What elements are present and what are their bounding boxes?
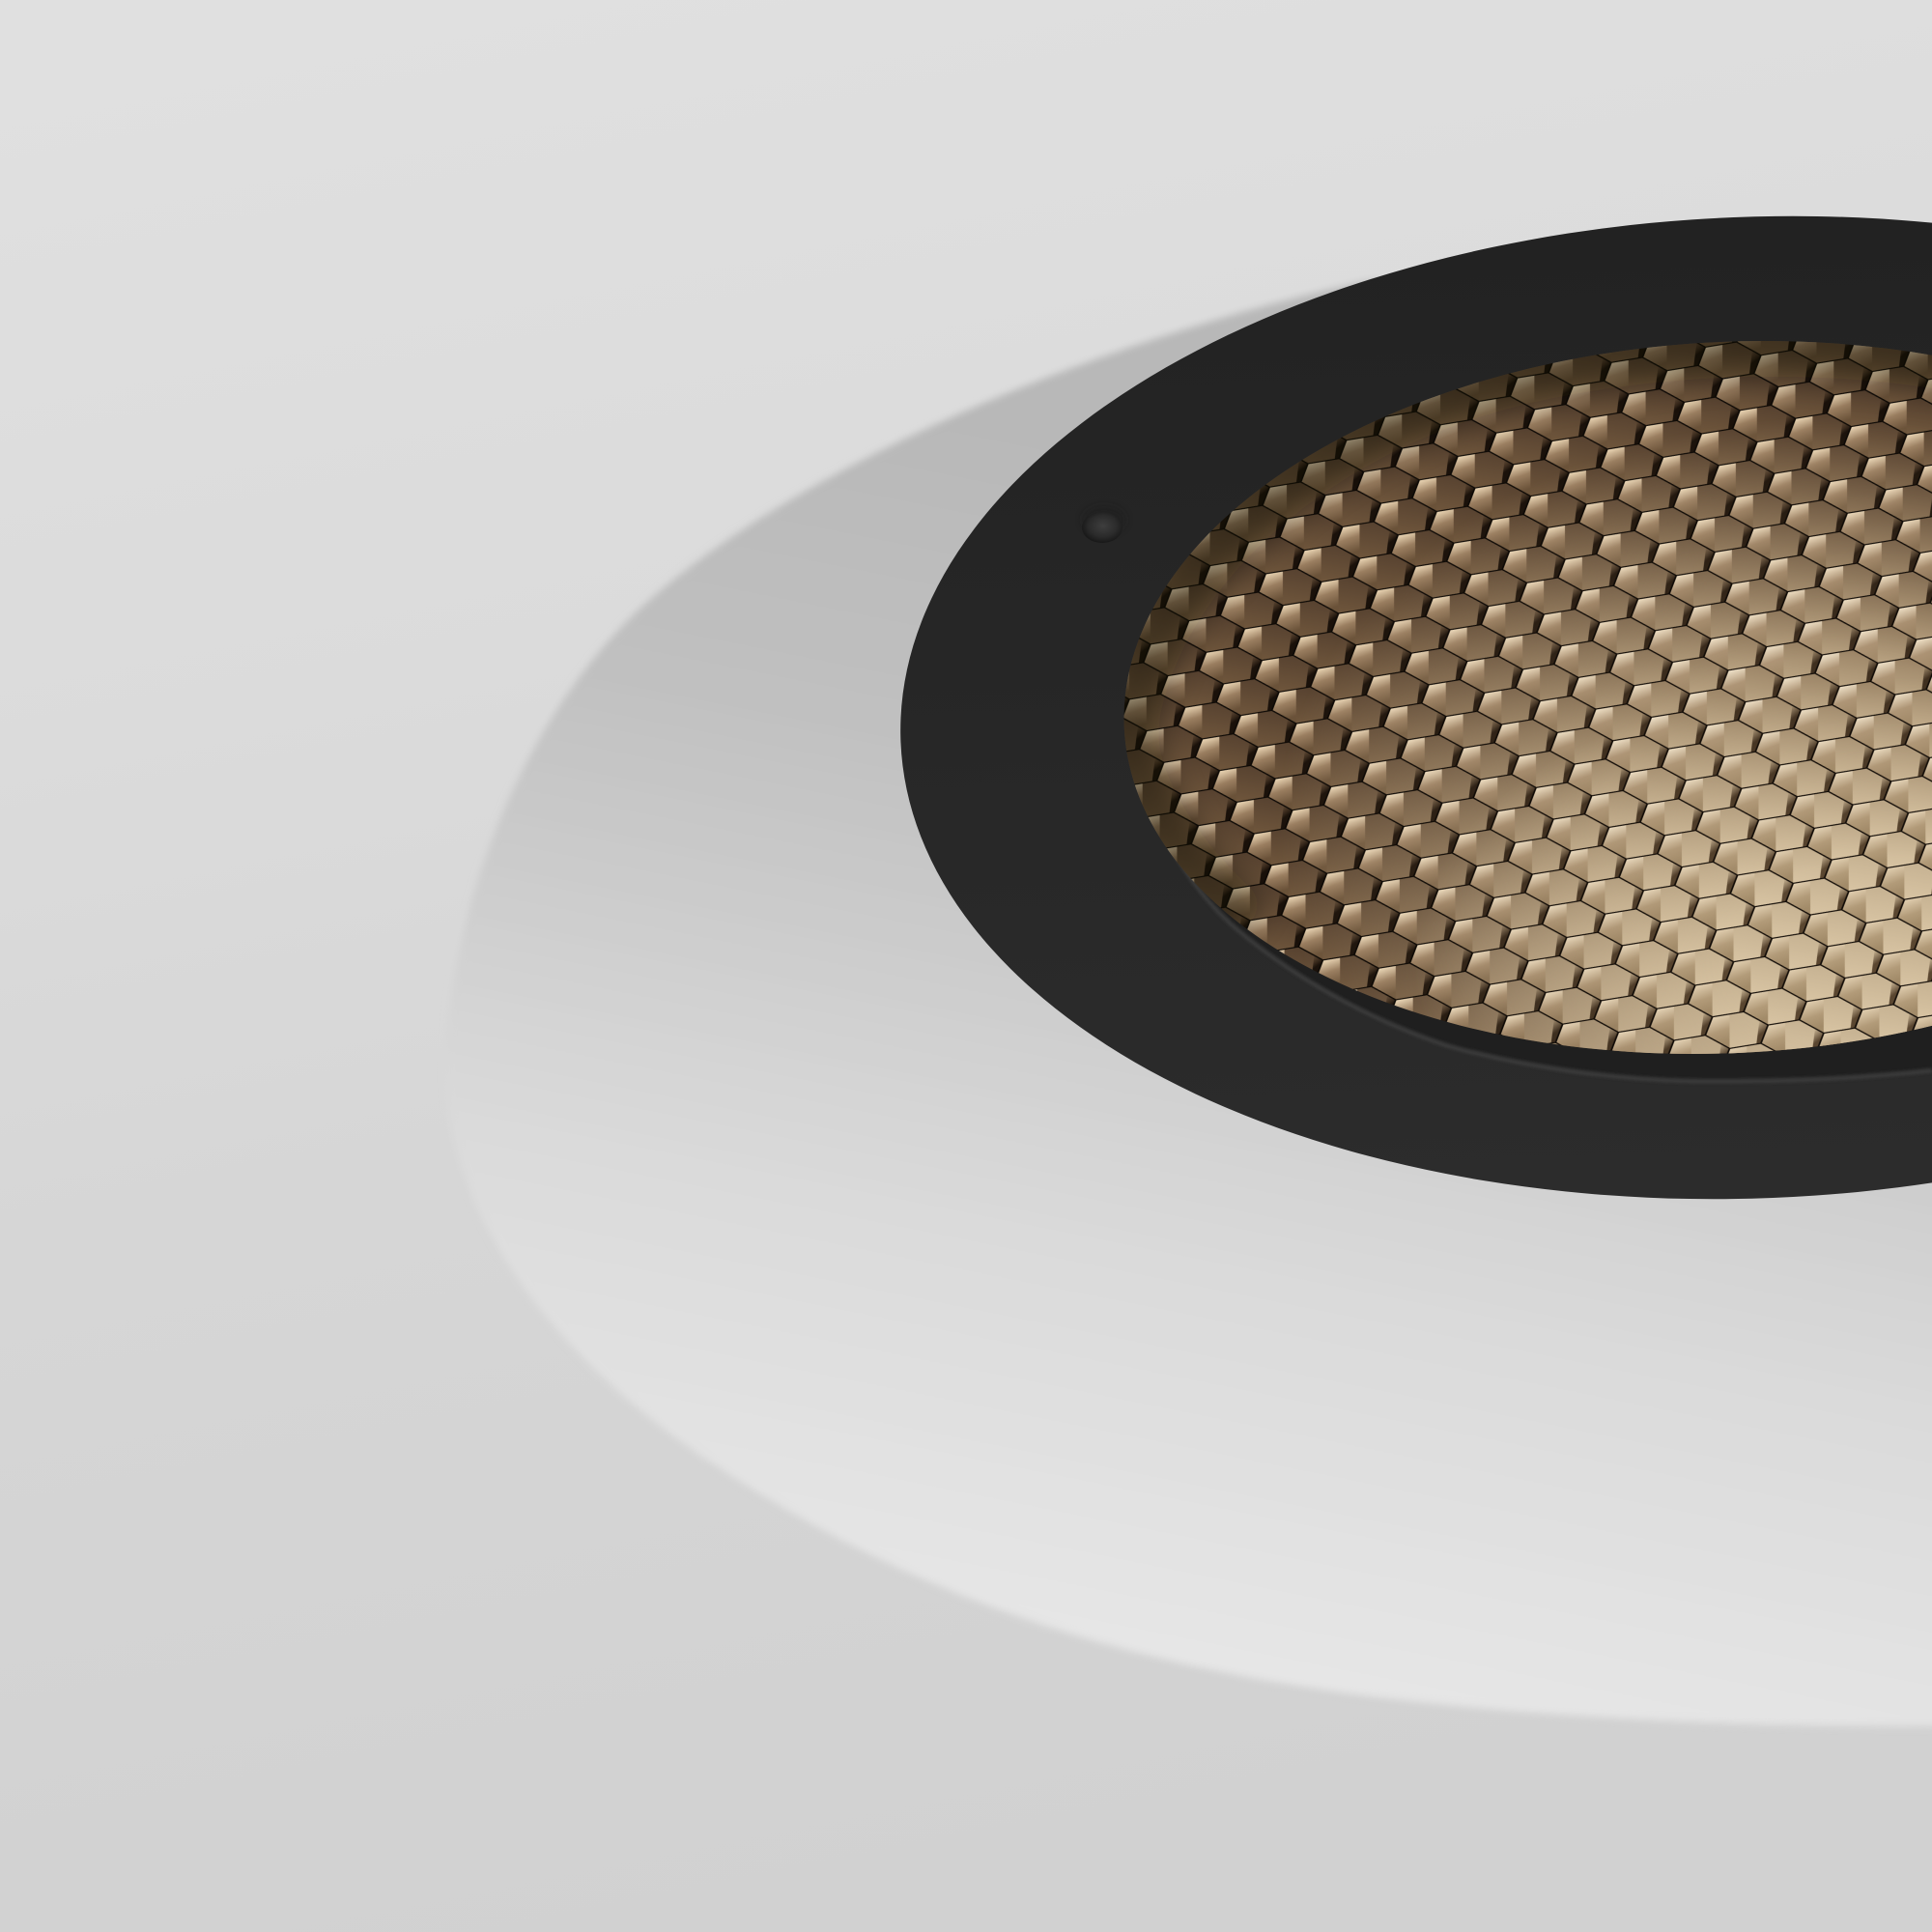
recessed ceiling dish	[446, 280, 1932, 1726]
groove highlight	[1128, 734, 1932, 1081]
icon: mounting screw	[1082, 506, 1125, 543]
rim shadow	[1125, 345, 1932, 927]
honeycomb louvre	[1124, 341, 1932, 1054]
black flange ring	[881, 184, 1932, 1232]
inner recess band	[1128, 676, 1932, 1081]
